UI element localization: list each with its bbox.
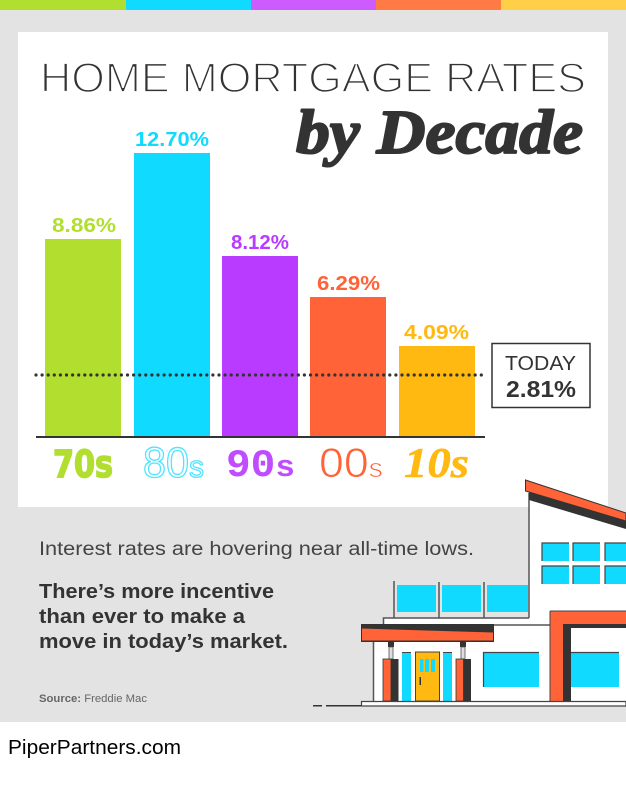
garage frame <box>550 611 626 701</box>
text block: incentive message: than ever to make a <box>39 606 246 628</box>
canopy <box>361 624 494 642</box>
upper wall <box>529 493 626 706</box>
decade labels: 10s <box>404 441 469 487</box>
text block: interest rates: Interest rates are hovering near all-time lows. <box>39 539 474 560</box>
text block: incentive message: There’s more incentive <box>39 581 274 603</box>
bar: 10s <box>399 321 475 437</box>
callout: today rate: TODAY <box>505 353 576 375</box>
website footer: PiperPartners.com <box>8 737 181 759</box>
bar: 80s <box>134 128 210 437</box>
bar: 80s: 12.70% <box>135 128 209 151</box>
bar: 00s <box>310 272 386 437</box>
bar: 10s: 4.09% <box>404 321 469 344</box>
text block: incentive message <box>39 581 288 653</box>
decade labels: 00s <box>319 439 383 486</box>
decade labels: 80s <box>143 439 204 487</box>
callout: today rate: 2.81% <box>506 376 576 402</box>
door <box>416 652 440 701</box>
decade labels <box>53 439 469 488</box>
text block: incentive message: move in today’s market. <box>39 631 288 653</box>
source: Source: Freddie Mac <box>39 693 147 705</box>
bar: 90s <box>222 231 298 437</box>
decade labels: 90s <box>226 444 295 488</box>
title: by Decade <box>296 99 583 167</box>
left column <box>383 641 398 701</box>
illustration: house <box>313 480 626 706</box>
balcony <box>374 493 550 701</box>
title <box>40 54 586 167</box>
bar: 70s <box>45 214 121 437</box>
top colour strip <box>0 0 626 10</box>
panel: chart <box>18 32 608 507</box>
lower window <box>483 652 539 687</box>
title: HOME MORTGAGE RATES <box>40 54 586 101</box>
roof <box>526 480 626 529</box>
bar: 70s: 8.86% <box>52 214 116 237</box>
bar: 90s: 8.12% <box>231 231 289 254</box>
lower wall <box>373 625 626 701</box>
today rate dotted line <box>36 373 487 377</box>
axis baseline <box>36 436 485 438</box>
right column <box>456 641 471 701</box>
bar chart <box>36 128 487 488</box>
upper windows <box>542 543 626 584</box>
sidelights <box>402 652 452 701</box>
ground line <box>313 705 626 706</box>
platform <box>362 702 626 706</box>
garage window <box>571 652 619 687</box>
callout: today rate <box>492 344 590 408</box>
bar: 00s: 6.29% <box>317 272 380 295</box>
decade labels: 70s <box>53 443 113 486</box>
